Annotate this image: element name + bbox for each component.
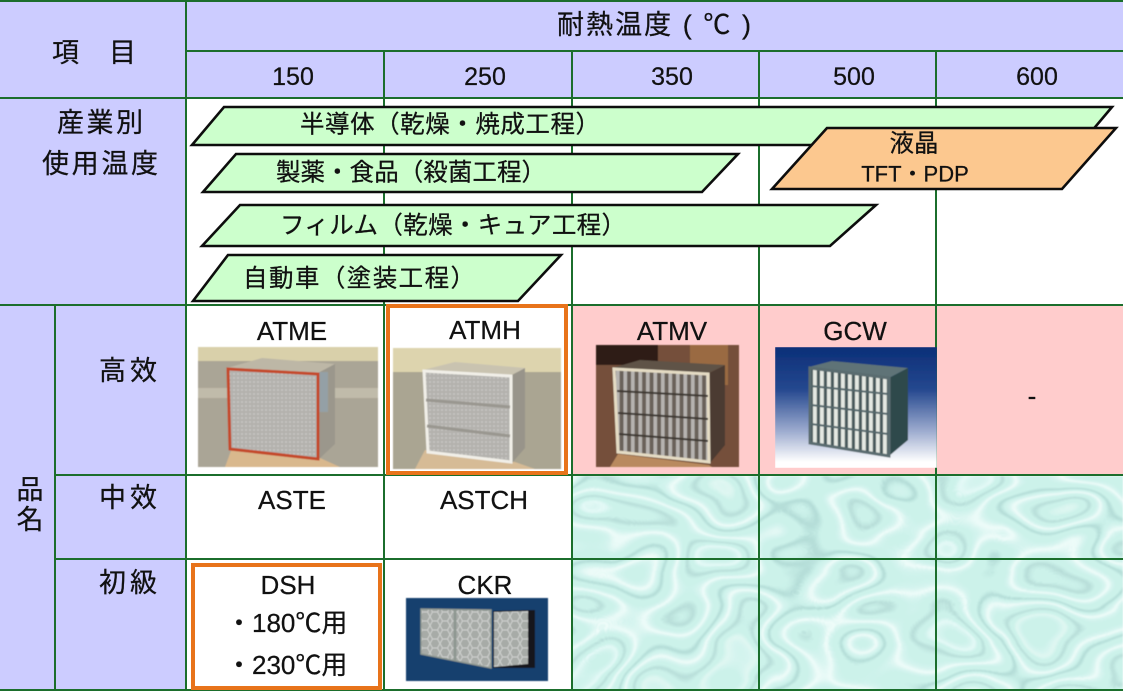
highlight border: DSH xyxy=(193,565,380,688)
product: DSH: ・180℃用 xyxy=(226,608,347,638)
bar: フィルム: フィルム（乾燥・キュア工程） xyxy=(280,212,626,240)
panel: white cells xyxy=(187,99,1123,691)
product: GCW: GCW xyxy=(823,316,887,346)
product: ATMV: ATMV xyxy=(637,316,708,346)
temperature column headings: 600 xyxy=(1016,63,1058,91)
product: ATMV xyxy=(596,316,739,467)
bar: 液晶 xyxy=(772,128,1116,189)
photo: ATMH filter xyxy=(393,348,561,469)
temperature column headings: 250 xyxy=(464,63,506,91)
photo: GCW filter xyxy=(775,347,937,468)
product: DSH xyxy=(193,565,380,688)
heading: 項目: 項 目 xyxy=(52,38,136,68)
bar: 液晶: 液晶 xyxy=(890,130,938,158)
photo: ATMV filter xyxy=(596,345,739,467)
product: ATMH: ATMH xyxy=(449,315,521,345)
row heading: 初級: 初級 xyxy=(99,568,157,598)
product: ATME xyxy=(198,316,378,467)
temperature column headings: 500 xyxy=(833,63,875,91)
product: ATMH xyxy=(388,306,566,473)
product: GCW xyxy=(775,316,937,468)
temperature column headings: 150 xyxy=(272,63,314,91)
row heading: 産業別使用温度 xyxy=(42,108,158,179)
row heading: 品名 xyxy=(16,475,44,535)
heading: 耐熱温度: 耐熱温度 ( ℃ ) xyxy=(557,10,751,40)
photo: ATME filter xyxy=(198,347,378,467)
row heading: 高効: 高效 xyxy=(99,356,157,386)
bar: フィルム xyxy=(202,205,876,246)
bar: 自動車: 自動車（塗装工程） xyxy=(243,264,475,292)
bar: 液晶: TFT・PDP xyxy=(861,162,969,186)
row heading: 中効: 中效 xyxy=(99,483,157,513)
empty value: 600 high efficiency: - xyxy=(1028,381,1036,411)
product: DSH: ・230℃用 xyxy=(226,650,347,680)
photo: CKR filter xyxy=(406,598,548,681)
bar: 半導体 xyxy=(192,107,1112,145)
highlight border: ATMH xyxy=(388,306,566,473)
temperature column headings: 350 xyxy=(651,63,693,91)
product: CKR: CKR xyxy=(458,570,512,600)
bar: 半導体: 半導体（乾燥・焼成工程） xyxy=(300,110,600,138)
product: ASTCH: ASTCH xyxy=(440,485,528,515)
bar: 製薬・食品: 製薬・食品（殺菌工程） xyxy=(276,158,546,186)
product: ASTE: ASTE xyxy=(258,485,326,515)
panel: water texture unavailable cells xyxy=(572,476,1123,691)
row heading: 産業別使用温度: 使用温度 xyxy=(42,149,158,179)
row heading: 品名: 名 xyxy=(16,505,44,535)
bar: 自動車 xyxy=(193,255,561,301)
temperature column headings xyxy=(272,63,1058,91)
row heading: 産業別使用温度: 産業別 xyxy=(57,108,143,138)
product: ATME: ATME xyxy=(257,316,327,346)
product: CKR xyxy=(406,570,548,681)
product: DSH: DSH xyxy=(261,570,315,600)
panel: pink unavailable cells xyxy=(572,306,1123,475)
row heading: 品名: 品 xyxy=(16,475,44,505)
bar: 製薬・食品 xyxy=(203,154,738,192)
